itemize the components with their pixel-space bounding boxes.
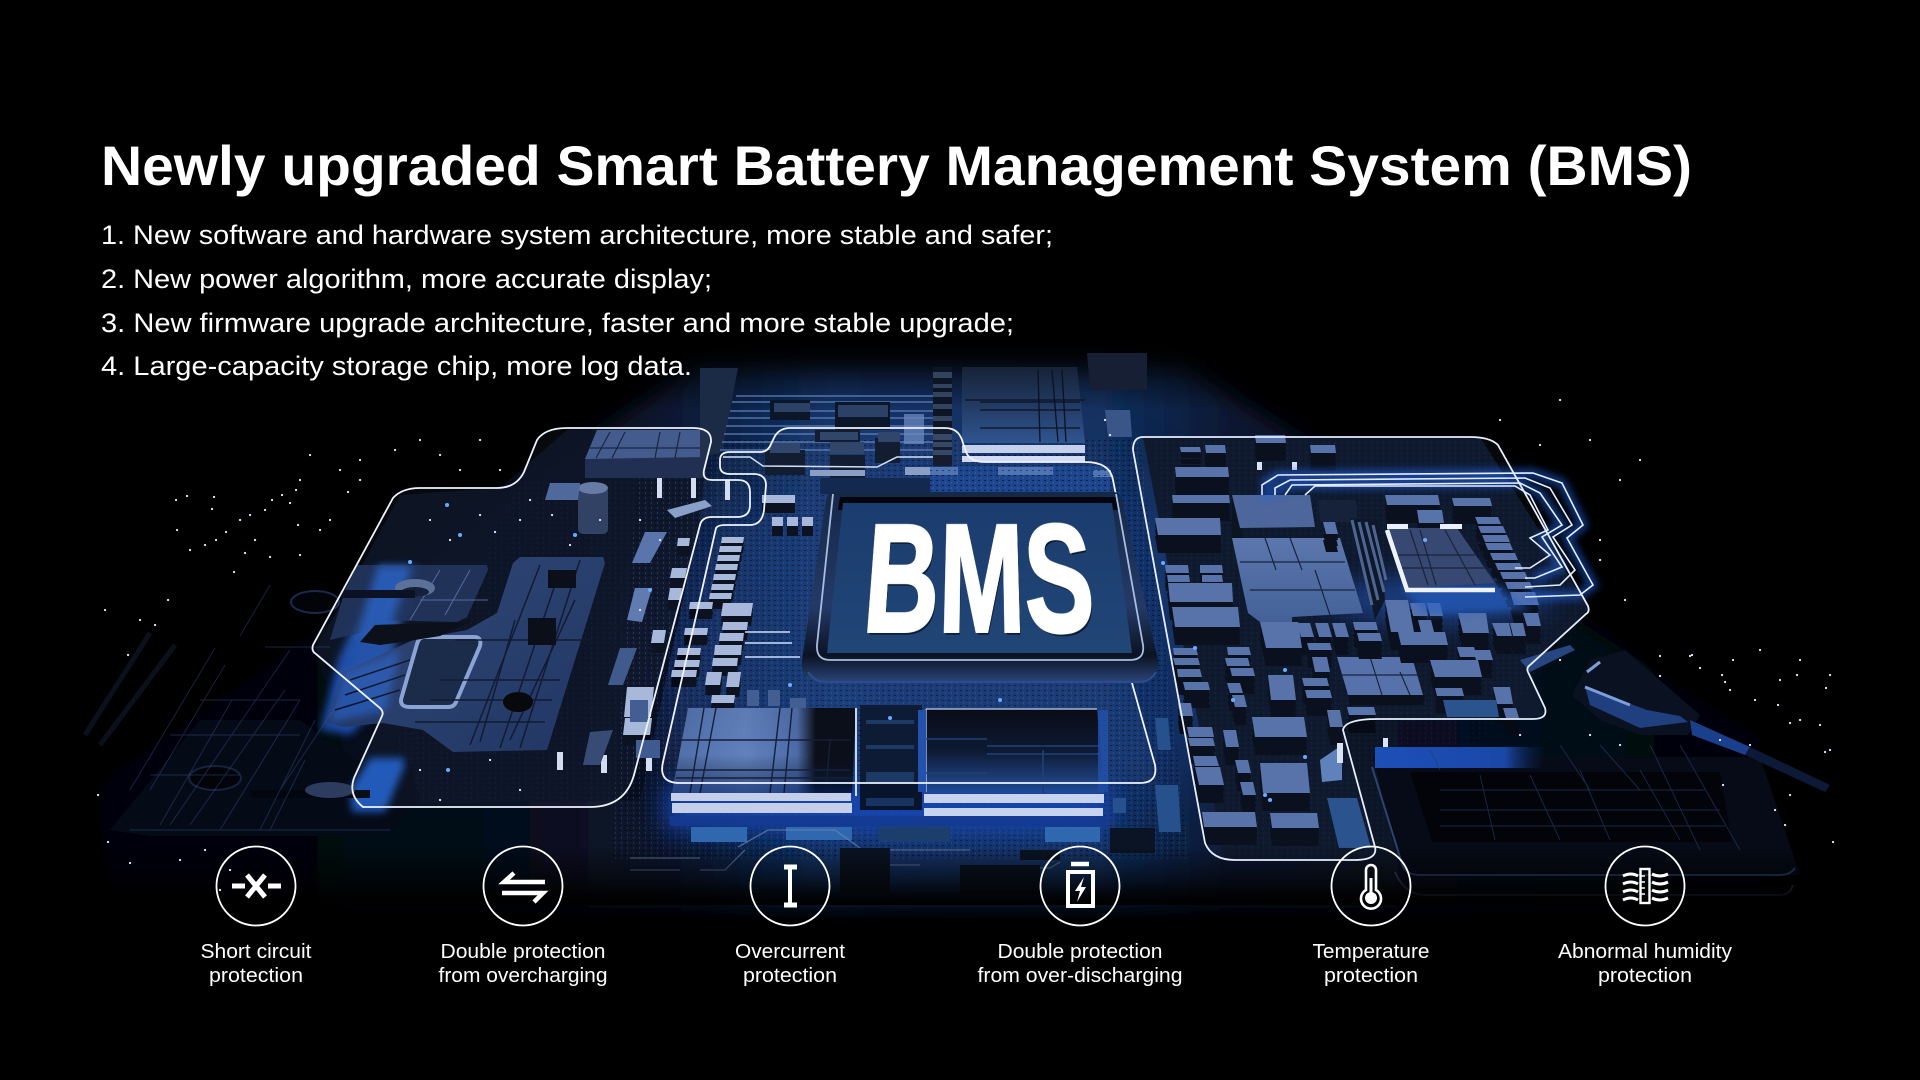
left zone floor (316, 430, 708, 805)
lower blue glow (350, 758, 405, 812)
top-right dim block (1087, 353, 1147, 390)
blue band above chip (930, 466, 1110, 494)
label: from over-discharging (978, 965, 1182, 987)
mounting hole (503, 692, 533, 712)
chip inner dark band (838, 497, 1118, 510)
comb tower (1350, 518, 1385, 620)
block B (924, 709, 1104, 793)
lower traces (630, 830, 1060, 870)
list item 4: 4. Large-capacity storage chip, more log data. (101, 351, 692, 381)
left top block (700, 368, 738, 458)
label: Double protection (998, 941, 1162, 963)
right-side components (1113, 435, 1593, 848)
blue band (1375, 747, 1548, 768)
label (438, 941, 608, 987)
label: Double protection (440, 941, 606, 963)
dark lower parts (840, 828, 1155, 895)
right zone floor (1143, 437, 1590, 860)
protection: overcharging (438, 846, 608, 987)
block A strips (671, 793, 851, 801)
icon: opposing arrows (484, 846, 562, 926)
dark recess (1410, 772, 1732, 842)
block B strips (924, 794, 1104, 803)
list item 2: 2. New power algorithm, more accurate display; (101, 264, 712, 294)
upper-left block (585, 430, 712, 478)
circuit board illustration (0, 320, 1920, 905)
glowing circuit traces (723, 457, 1593, 597)
chips above BMS (810, 467, 1111, 477)
top big block (962, 367, 1085, 443)
label: Temperature (1312, 941, 1430, 963)
list item 1: 1. New software and hardware system architecture, more stable and safer; (101, 220, 1053, 250)
CPU tabs (1387, 524, 1462, 529)
top centre parts (700, 353, 1147, 494)
white trace lines (720, 396, 933, 450)
pins (1257, 462, 1388, 763)
feature list (101, 220, 1053, 381)
glow under blocks (665, 785, 1110, 830)
blue glow stripe (320, 567, 420, 735)
right dark wedge (1180, 320, 1920, 800)
chip body (802, 492, 1158, 682)
icon: battery with bolt (1040, 846, 1120, 926)
blue right traces glow (1262, 473, 1593, 597)
bottom centre battery blocks (630, 690, 1155, 895)
block A (672, 708, 856, 793)
thin traces (745, 632, 800, 657)
label: Abnormal humidity (1558, 941, 1732, 963)
label (1558, 941, 1732, 987)
plate lines (335, 560, 590, 748)
icon: current I-beam (750, 846, 830, 926)
outline: centre zone (662, 428, 1155, 783)
plate grid (1430, 745, 1740, 850)
grey parts (632, 532, 667, 563)
dark small parts (765, 400, 900, 480)
protection: abnormal humidity (1558, 846, 1732, 987)
icon: humidity (1606, 846, 1684, 926)
dark plate (1373, 757, 1800, 875)
CPU white edge (1387, 530, 1495, 590)
label: protection (743, 965, 837, 987)
screw bump (395, 579, 435, 597)
chip tops (1155, 435, 1541, 828)
centre column (860, 705, 922, 810)
blue accent parts (1113, 700, 1499, 848)
main plate (325, 557, 605, 752)
CPU glow (1400, 585, 1530, 615)
CPU (1387, 528, 1495, 588)
capacitor (578, 486, 608, 534)
protection: overcurrent (735, 846, 845, 987)
blue sparkles (410, 505, 1425, 800)
label (978, 941, 1182, 987)
left plate assembly (110, 557, 605, 836)
large component tops (1232, 495, 1315, 540)
slot (360, 622, 470, 645)
protection: temperature (1312, 846, 1430, 987)
blue shoulder (330, 650, 400, 722)
centre blue glow (640, 450, 1280, 850)
chip rim (817, 494, 1143, 660)
list item 3: 3. New firmware upgrade architecture, faster and more stable upgrade; (101, 308, 1014, 338)
icon: short circuit (216, 846, 296, 926)
pins (557, 478, 730, 773)
dim glow (1330, 574, 1550, 626)
blue streak (1690, 720, 1750, 755)
board base (90, 362, 1840, 900)
label (200, 941, 312, 987)
chip face (827, 503, 1132, 653)
label: protection (1324, 965, 1418, 987)
light chips (623, 495, 813, 735)
white strips top (962, 445, 1085, 453)
label: Short circuit (200, 941, 312, 963)
outline: right zone (1133, 437, 1589, 860)
star dots (98, 400, 1833, 890)
right slanted small plate (1520, 645, 1575, 672)
plate edges (1372, 767, 1795, 875)
icon: thermometer (1332, 846, 1410, 926)
left board blue lines (130, 585, 390, 830)
diagonal chip (667, 500, 712, 518)
label: Overcurrent (735, 941, 845, 963)
bottom fade (0, 845, 1920, 905)
mid chip (1348, 695, 1425, 705)
label: protection (209, 965, 303, 987)
chip extrusions (1155, 453, 1541, 846)
BMS chip (802, 492, 1158, 682)
blue stripe on upper plate (356, 566, 412, 640)
BMS lettering: BMS (858, 495, 1100, 668)
label: from overcharging (438, 965, 608, 987)
metal wedge (1572, 650, 1700, 735)
blue side bars (918, 710, 926, 792)
outline: left zone (312, 428, 750, 807)
left dark wedge (0, 320, 690, 790)
blue highlight (904, 414, 924, 444)
small dark parts (548, 570, 576, 588)
parts above block A (630, 690, 806, 758)
lower-left dark plate (110, 720, 420, 836)
upper-left plate (330, 565, 488, 640)
left-centre electronic parts (545, 430, 813, 773)
grain texture (610, 440, 1190, 860)
label (735, 941, 845, 987)
top fade (0, 340, 1920, 410)
label: protection (1598, 965, 1692, 987)
title: Newly upgraded Smart Battery Management System (BMS) (101, 134, 1692, 197)
large chip (1232, 538, 1363, 625)
left holes (291, 591, 339, 613)
capsule (401, 637, 480, 707)
stack column (933, 367, 952, 467)
bottom-right plate (1372, 645, 1830, 895)
chip front shadows (623, 505, 813, 745)
label (1312, 941, 1430, 987)
protection: short circuit (200, 846, 312, 987)
protection: over-discharging (978, 846, 1182, 987)
lower small blue parts (691, 827, 1100, 842)
